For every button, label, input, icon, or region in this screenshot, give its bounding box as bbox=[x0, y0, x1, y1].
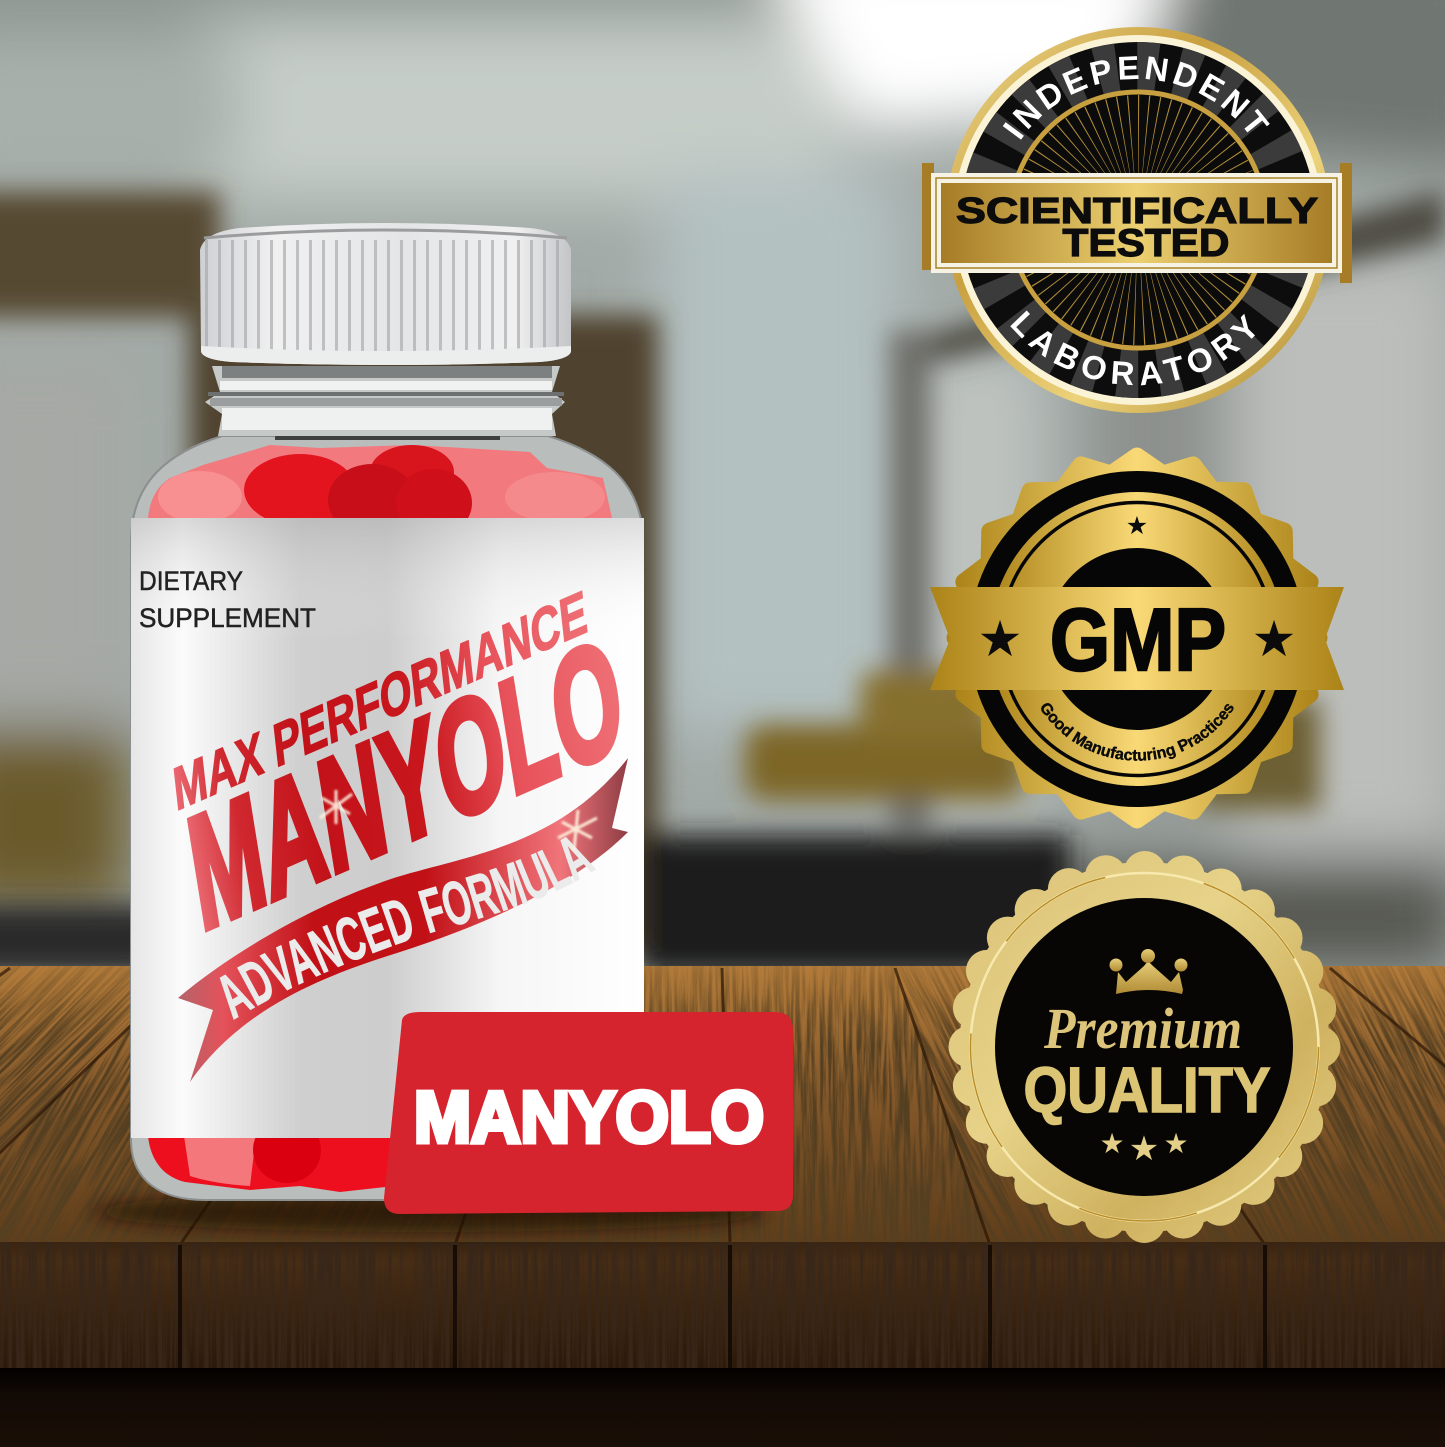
band text: SCIENTIFICALLY bbox=[956, 190, 1318, 231]
independent text: INDEPENDENT bbox=[1002, 56, 1270, 140]
three stars: ★ bbox=[1163, 1128, 1189, 1159]
three stars: ★ bbox=[1099, 1128, 1125, 1159]
ribbon sparkle bbox=[558, 810, 597, 850]
manyolo brand text: MANYOLO bbox=[178, 603, 633, 965]
badge: premium quality bbox=[960, 862, 1330, 1232]
gold band bbox=[922, 163, 1352, 283]
red manyolo tag bbox=[384, 1012, 793, 1214]
band text: TESTED bbox=[1062, 222, 1230, 265]
supplement bottle bbox=[130, 223, 644, 1201]
three stars: ★ bbox=[1129, 1130, 1159, 1168]
gummies bottom bbox=[148, 1117, 395, 1192]
dietary supplement text: SUPPLEMENT bbox=[139, 603, 316, 633]
quality text: QUALITY bbox=[1024, 1054, 1270, 1126]
premium text: Premium bbox=[1043, 996, 1242, 1061]
banner stars: ★ bbox=[1252, 611, 1296, 667]
red ribbon bbox=[178, 758, 628, 1082]
star: ★ bbox=[1126, 512, 1148, 540]
sparkle bbox=[320, 790, 352, 824]
icon: crown bbox=[1110, 949, 1188, 994]
blurred room background bbox=[0, 0, 1445, 980]
glass neck bbox=[205, 366, 565, 440]
gmp text: GMP bbox=[1050, 590, 1226, 689]
max performance text: MAX PERFORMANCE bbox=[170, 577, 590, 824]
good manufacturing practices text: Good Manufacturing Practices bbox=[1041, 703, 1234, 761]
gummies top bbox=[148, 445, 612, 537]
gold banner bbox=[930, 587, 1344, 690]
red manyolo tag: MANYOLO bbox=[414, 1078, 764, 1158]
table bottom shadow bbox=[0, 1368, 1445, 1447]
badge: scientifically tested bbox=[922, 27, 1352, 413]
table front edge bbox=[0, 1242, 1445, 1370]
banner stars: ★ bbox=[978, 611, 1022, 667]
laboratory text: LABORATORY bbox=[1010, 310, 1255, 386]
dietary supplement text: DIETARY bbox=[139, 566, 243, 596]
wooden table top bbox=[0, 966, 1445, 1246]
bottle shadow bbox=[90, 1192, 770, 1232]
badge: gmp bbox=[930, 448, 1344, 828]
glass body bbox=[131, 436, 643, 1200]
bottle cap bbox=[200, 223, 571, 365]
advanced formula text: ADVANCED FORMULA bbox=[220, 836, 596, 1020]
white product label bbox=[131, 518, 644, 1138]
sunburst bbox=[1010, 92, 1266, 348]
